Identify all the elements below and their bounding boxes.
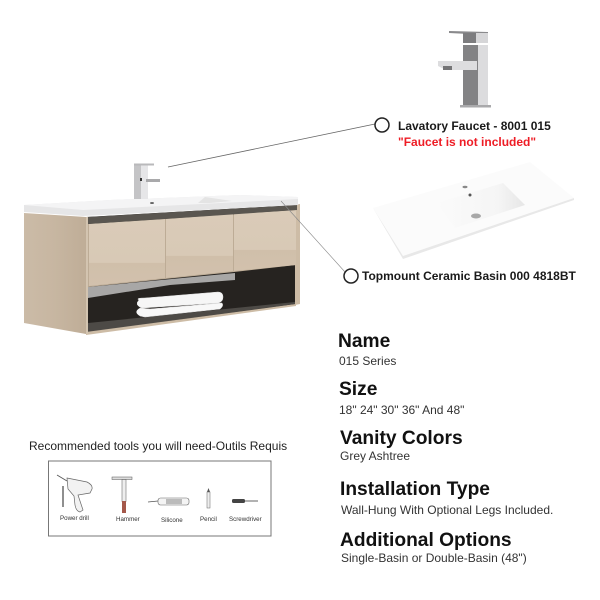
spec: vanity colors: Vanity Colors: [340, 428, 463, 449]
vanity illustration: [24, 164, 300, 335]
cabinet interior: [86, 205, 297, 334]
tool: power drill: Power drill: [60, 515, 89, 522]
drawer right: [234, 210, 296, 271]
spec: name: Name: [338, 331, 391, 352]
cabinet bottom edge: [86, 304, 296, 335]
spec: name: 015 Series: [339, 354, 396, 368]
drawer backing: [88, 210, 296, 287]
tool: pencil: Pencil: [200, 516, 217, 523]
cabinet side panel: [24, 213, 86, 334]
leader line: basin: [281, 201, 345, 272]
spec: size: [339, 379, 464, 417]
tools box: [48, 461, 271, 536]
spec: installation type: Wall-Hung With Optional Legs Included.: [341, 503, 553, 517]
spec: size: 18" 24" 30" 36" And 48": [339, 403, 464, 417]
tool: screwdriver: Screwdriver: [229, 516, 262, 523]
tool: screwdriver: [229, 499, 262, 523]
faucet product image: [438, 31, 491, 108]
spec: installation type: [340, 479, 553, 517]
towels: [136, 292, 223, 317]
cabinet left front edge: [86, 217, 88, 334]
faucet on vanity: [134, 164, 160, 199]
spec: additional options: Single-Basin or Double-Basin (48"): [341, 551, 527, 565]
shelf surface: [88, 302, 295, 332]
spec: vanity colors: Grey Ashtree: [340, 449, 410, 463]
tool: silicone: [148, 498, 189, 524]
dark gap below top: [88, 205, 297, 224]
callout marker: basin: [344, 269, 358, 283]
callout marker: faucet: [375, 118, 389, 132]
drain: [150, 202, 154, 204]
tool: hammer: [112, 477, 140, 523]
basin product image: [373, 162, 574, 259]
cabinet right edge: [295, 204, 300, 305]
tools heading: Recommended tools you will need-Outils Requis: [29, 439, 287, 453]
spec: additional options: [340, 530, 527, 565]
spec: installation type: Installation Type: [340, 479, 490, 500]
spec: size: Size: [339, 379, 378, 400]
faucet note: "Faucet is not included": [398, 135, 536, 149]
tool: silicone: Silicone: [161, 517, 183, 524]
drawer left: [89, 219, 165, 286]
spec: vanity colors: [340, 428, 463, 463]
tool: hammer: Hammer: [116, 516, 140, 523]
spec: name: [338, 331, 396, 368]
sink recess: [198, 197, 232, 203]
tool: pencil: [200, 488, 217, 523]
drawer middle: [166, 214, 233, 278]
tool: power drill: [57, 475, 92, 522]
spec: additional options: Additional Options: [340, 530, 512, 551]
leader line: faucet: [168, 124, 375, 167]
basin label: Topmount Ceramic Basin 000 4818BT: [362, 269, 577, 283]
countertop: [24, 195, 298, 216]
faucet label: Lavatory Faucet - 8001 015: [398, 119, 551, 133]
grey underside: [88, 273, 235, 298]
